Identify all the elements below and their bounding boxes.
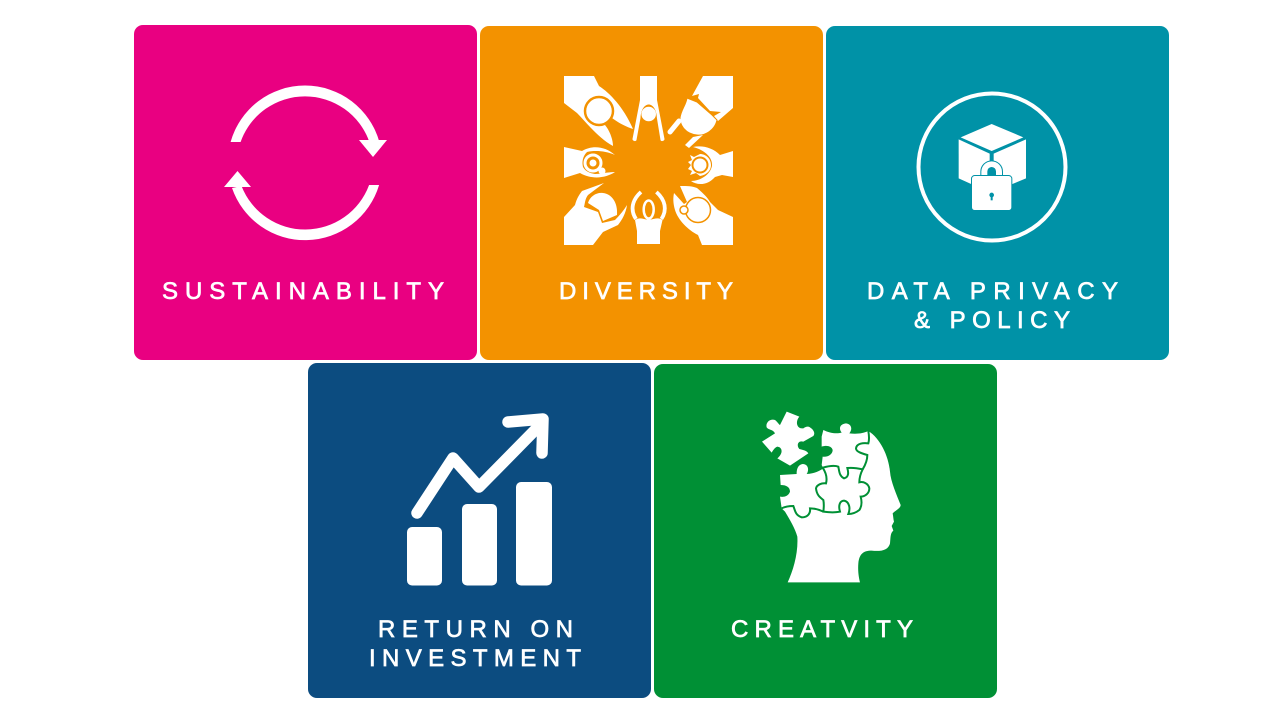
panel: return on investment — [308, 363, 651, 698]
panel: data privacy and policy — [826, 26, 1169, 360]
label: return on investment — [369, 616, 581, 672]
label: data privacy and policy — [867, 278, 1118, 334]
label: data privacy and policy: DATA PRIVACY — [867, 278, 1118, 305]
label: diversity: DIVERSITY — [559, 278, 733, 305]
label: return on investment: INVESTMENT — [369, 645, 581, 672]
panel: sustainability — [134, 25, 477, 360]
label: return on investment: RETURN ON — [378, 616, 573, 643]
icon: head with puzzle pieces — [762, 412, 901, 582]
icon: circular arrows — [224, 86, 387, 240]
panel: diversity — [480, 26, 823, 360]
panel: creativity — [654, 364, 997, 698]
label: creativity: CREATVITY — [731, 616, 913, 643]
label: data privacy and policy: & POLICY — [914, 307, 1070, 334]
icon: rising bar chart with arrow — [407, 419, 552, 586]
icon: circle of hands — [564, 76, 733, 245]
icon: locked cube in circle — [918, 94, 1066, 240]
label: sustainability: SUSTAINABILITY — [162, 278, 444, 305]
